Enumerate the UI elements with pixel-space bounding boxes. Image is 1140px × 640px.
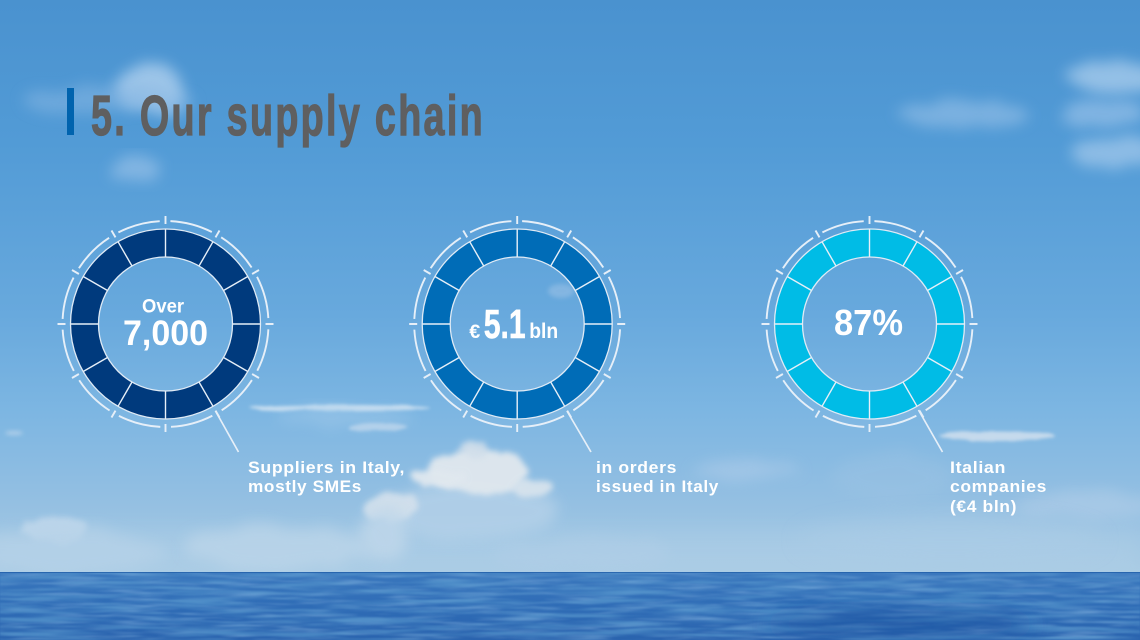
label: Italian companies: Italian [950, 458, 1006, 477]
leader line: suppliers [216, 411, 238, 452]
value: bln [529, 320, 558, 343]
background: sea [0, 572, 1140, 640]
label: orders: in orders [596, 458, 677, 477]
label: orders: issued in Italy [596, 477, 719, 496]
label: Italian companies [950, 458, 1047, 516]
ring chart: suppliers [58, 216, 274, 432]
title accent bar [67, 88, 74, 135]
title: 5. Our supply chain [91, 84, 485, 148]
cumulus cloud [360, 442, 560, 558]
value: 5.1 [484, 301, 526, 347]
label: suppliers: Suppliers in Italy, [248, 458, 405, 477]
label: suppliers: mostly SMEs [248, 477, 362, 496]
value: € [469, 322, 481, 343]
value: 87% [834, 302, 903, 343]
label: Italian companies: companies [950, 477, 1047, 496]
label: orders [596, 458, 719, 496]
ring chart: Italian companies [762, 216, 978, 432]
value: Over [142, 296, 185, 318]
clouds: upper sky [25, 61, 1140, 298]
label: Italian companies: (€4 bln) [950, 497, 1017, 516]
value [469, 301, 558, 347]
value: 7,000 [123, 314, 208, 353]
leader line: orders [567, 411, 591, 452]
leader line: Italian companies [918, 410, 942, 452]
clouds: lower sky and horizon haze [0, 405, 1140, 575]
ring chart: orders [409, 216, 625, 432]
label: suppliers [248, 458, 405, 496]
value [123, 296, 208, 353]
